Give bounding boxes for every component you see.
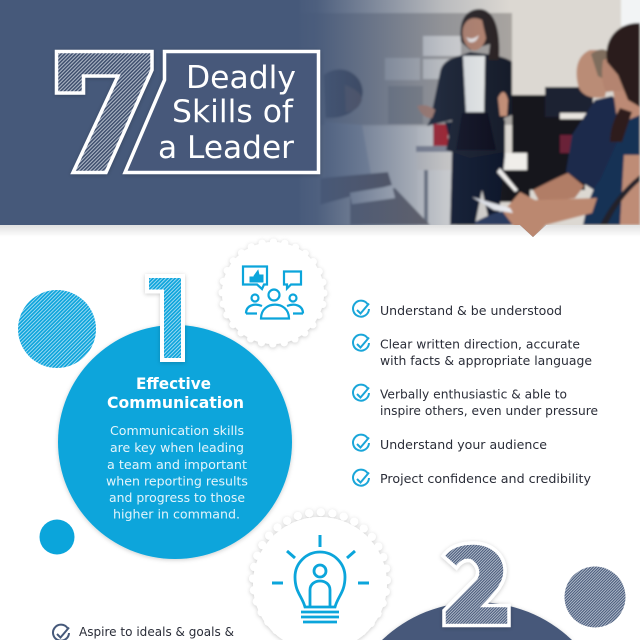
photo: presenter and seated audience <box>300 0 640 240</box>
panel: skill 1 circle <box>58 325 292 559</box>
numeral 7 <box>56 52 152 172</box>
heading: Effective Communication: Communication <box>107 393 244 412</box>
item: verbally enthusiastic: inspire others, even under pressure <box>380 404 598 419</box>
text block: communication description: Communication skills <box>110 424 244 439</box>
icon: light bulb with person <box>272 535 369 622</box>
text block: communication description: and progress to those <box>109 491 245 506</box>
item: audience: Understand your audience <box>380 438 547 453</box>
presenter <box>445 120 505 225</box>
item: clear direction: Clear written direction, accurate <box>380 338 580 352</box>
badge: leadership bulb icon <box>253 512 387 640</box>
scalloped badge <box>222 242 324 344</box>
hero shadow band <box>0 225 640 237</box>
text block: communication description: when reporting results <box>106 474 248 490</box>
heading: Effective Communication: Effective <box>136 374 211 393</box>
panel: hero banner <box>0 0 640 240</box>
title text <box>158 60 296 166</box>
item: verbally enthusiastic: Verbally enthusiastic & able to <box>380 388 567 402</box>
heading: Effective Communication <box>107 374 244 412</box>
badge: communication icon <box>222 242 324 344</box>
text block: communication description <box>106 424 248 522</box>
decorative hatched circle: navy <box>564 566 626 628</box>
text block: communication description: higher in command. <box>113 508 240 522</box>
numeral 2 <box>443 543 509 626</box>
numeral 1 <box>147 276 183 360</box>
item: audience <box>353 435 547 453</box>
icon: people talking <box>243 266 303 318</box>
seated person on left <box>323 69 363 118</box>
scalloped badge <box>253 512 387 640</box>
title text: Skills of <box>172 94 294 130</box>
checklist item: aspire: Aspire to ideals & goals & <box>79 625 234 640</box>
item: confidence: Project confidence and credibility <box>380 472 591 487</box>
decorative hatched circle: blue <box>18 290 96 368</box>
navy fade over photo <box>298 0 494 225</box>
decorative solid circle: blue <box>40 520 74 554</box>
item: verbally enthusiastic <box>353 385 598 419</box>
man <box>576 50 610 98</box>
title frame <box>125 52 318 172</box>
text block: communication description: a team and important <box>107 458 247 473</box>
item: clear direction: with facts & appropriate language <box>380 354 592 369</box>
panel: skill 2 circle <box>382 602 572 640</box>
title: 7 Deadly Skills of a Leader <box>56 52 318 172</box>
checklist: communication skills <box>353 301 598 487</box>
item: understand: Understand & be understood <box>380 304 562 319</box>
text block: communication description: are key when leading <box>110 441 244 456</box>
woman <box>612 88 640 120</box>
item: clear direction <box>353 335 592 369</box>
title text: Deadly <box>186 60 296 96</box>
title text: a Leader <box>158 130 294 166</box>
